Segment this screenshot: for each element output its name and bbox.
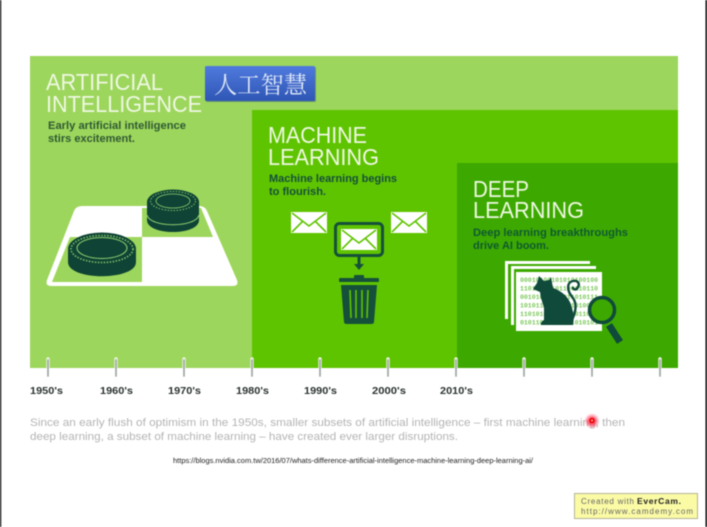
text: binary digits: 01011010101101010101 (520, 320, 598, 326)
timeline labels: 1980's (236, 385, 269, 397)
cursor highlight (584, 413, 600, 429)
text: DL description (473, 227, 628, 252)
heading: deep learning (473, 176, 584, 223)
text: binary digits: 11010110101100110110 (520, 286, 598, 292)
text: binary digits: 10101101001011010010 (520, 302, 598, 310)
icon: magnifying glass (590, 298, 620, 342)
caption (30, 417, 625, 443)
text: binary digits (520, 277, 598, 326)
watermark: EverCam: Created with (581, 497, 634, 506)
text: AI description: Early artificial intelligence (48, 120, 186, 132)
text: DL description: Deep learning breakthroughs (473, 227, 628, 239)
caption: Since an early flush of optimism in the 1950s, smaller subsets of artificial intelligence – first machine learning, then (30, 417, 625, 429)
arrow: down to trash (354, 257, 364, 270)
heading: deep learning: LEARNING (473, 197, 584, 223)
heading: machine learning (268, 122, 379, 170)
heading: machine learning: MACHINE (268, 122, 367, 148)
panel: deep learning (457, 163, 678, 368)
text: binary digits: 11010100110101011010 (520, 311, 598, 318)
watermark: EverCam: EverCam. (637, 496, 681, 506)
caption: deep learning, a subset of machine learning – have created ever larger disruptions. (30, 431, 458, 443)
icon: cat (533, 276, 579, 325)
timeline labels (30, 385, 473, 397)
icon: checkers board (46, 190, 238, 286)
icon: single checker (68, 232, 136, 276)
label: Chinese title badge (205, 66, 316, 102)
heading: artificial intelligence: ARTIFICIAL (46, 69, 163, 95)
text: ML description: Machine learning begins (269, 173, 397, 185)
panel: machine learning (252, 110, 678, 368)
timeline labels: 1960's (100, 385, 133, 397)
text: ML description (269, 173, 397, 198)
text: binary digits: 00010100101010100100 (520, 277, 598, 284)
timeline labels: 2010's (440, 385, 473, 397)
timeline labels: 1950's (30, 385, 63, 397)
heading: artificial intelligence (46, 69, 202, 117)
watermark: EverCam: http://www.camdemy.com (581, 507, 693, 516)
label: Chinese title badge: 人工智慧 (214, 72, 308, 99)
text: AI description: stirs excitement. (48, 133, 135, 145)
source url: https://blogs.nvidia.com.tw/2016/07/whats-difference-artificial-intelligence-machine-learning-deep-learning-ai/ (173, 458, 533, 465)
text: DL description: drive AI boom. (473, 240, 549, 252)
icon: trash can (339, 275, 379, 324)
text: AI description (48, 120, 186, 145)
heading: deep learning: DEEP (473, 176, 529, 202)
icon: data sheets (505, 261, 602, 331)
icon: right envelope (391, 212, 427, 233)
watermark: EverCam (574, 494, 698, 518)
timeline labels: 1970's (168, 385, 201, 397)
heading: machine learning: LEARNING (268, 144, 379, 170)
timeline labels: 1990's (304, 385, 337, 397)
text: binary digits: 00101011010011010111 (520, 294, 598, 301)
timeline labels: 2000's (372, 385, 406, 397)
panel: artificial intelligence (30, 56, 678, 368)
icon: filter box with envelope (336, 224, 382, 256)
text: ML description: to flourish. (269, 186, 326, 198)
heading: artificial intelligence: INTELLIGENCE (46, 91, 202, 117)
timeline ticks (48, 359, 660, 376)
icon: left envelope (291, 212, 327, 233)
icon: stacked checkers (147, 190, 199, 232)
